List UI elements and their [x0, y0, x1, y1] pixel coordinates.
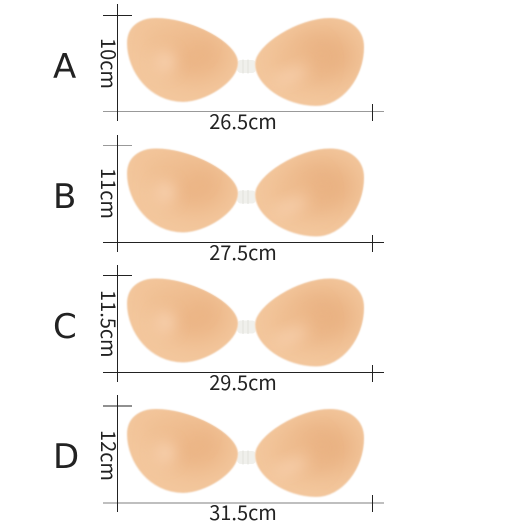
row B: size B dimensions	[53, 135, 384, 266]
dimension lines C	[103, 265, 384, 382]
row C: size C dimensions	[53, 265, 384, 396]
product image A	[127, 18, 364, 106]
size letter C: C	[53, 307, 77, 347]
width label C: 29.5cm	[209, 367, 277, 396]
height label D: 12cm	[95, 430, 124, 481]
row A: size A dimensions	[53, 4, 384, 135]
dimension lines D	[103, 395, 384, 512]
product image C	[127, 278, 364, 366]
size letter D: D	[53, 437, 79, 477]
dimension lines B	[103, 135, 384, 252]
row D: size D dimensions	[53, 395, 384, 526]
width label D: 31.5cm	[209, 497, 277, 526]
product image B	[127, 148, 364, 236]
dimension lines A	[103, 4, 384, 121]
width label A: 26.5cm	[209, 106, 277, 135]
product image D	[127, 409, 364, 497]
size letter A: A	[53, 47, 76, 87]
height label C: 11.5cm	[95, 290, 124, 358]
height label A: 10cm	[95, 38, 124, 89]
size letter B: B	[53, 177, 76, 217]
height label B: 11cm	[95, 168, 124, 219]
width label B: 27.5cm	[209, 237, 277, 266]
